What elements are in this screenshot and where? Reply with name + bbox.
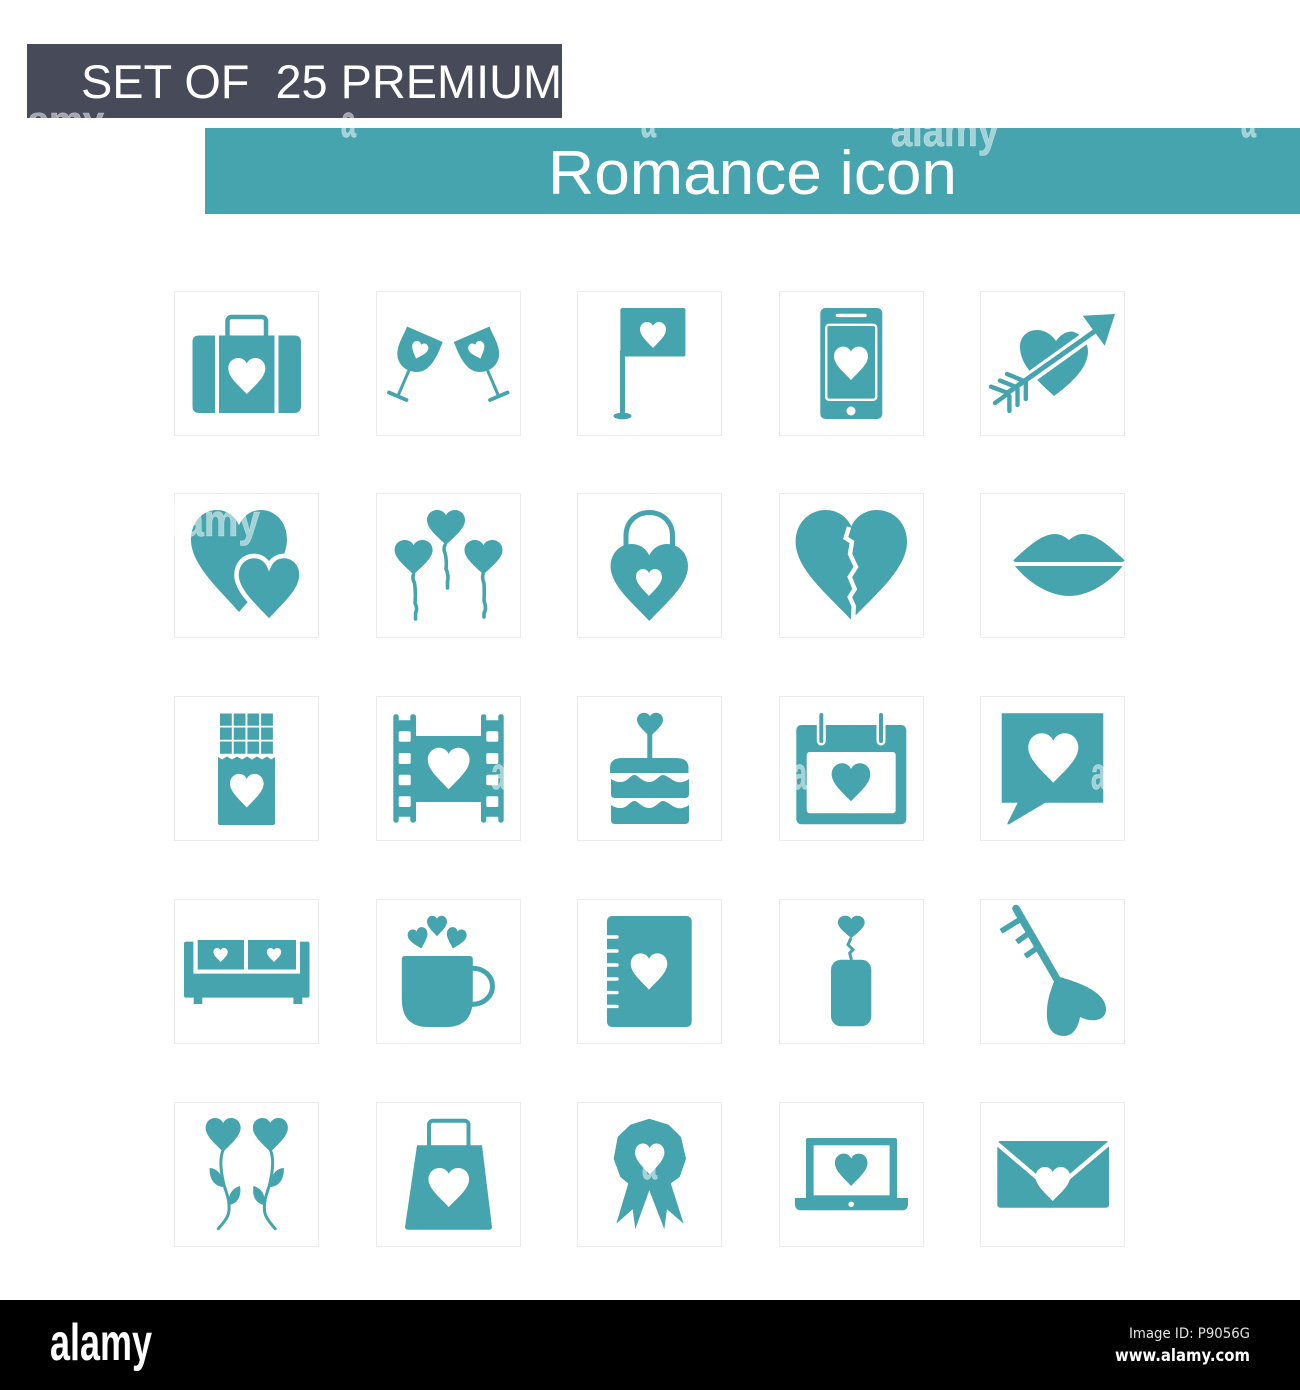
icon: suitcase (174, 292, 318, 436)
watermark fragments (28, 96, 1257, 1189)
icon: love letter envelope (980, 1102, 1124, 1246)
icon: heart tag (780, 900, 924, 1044)
icon: birthday cake (578, 696, 722, 840)
watermark fragments: alamy (150, 495, 260, 546)
watermark fragments: a (792, 748, 808, 799)
icon: two hearts (174, 494, 318, 638)
watermark fragments: a (341, 96, 357, 147)
icon: heart key (980, 900, 1124, 1044)
icon: flag (578, 292, 722, 436)
icon: coffee mug with hearts (376, 900, 520, 1044)
banner: set of 25 premium (27, 44, 562, 118)
watermark fragments: a (1241, 96, 1257, 147)
watermark fragments: a (642, 1138, 658, 1189)
footer website: www.alamy.com (1115, 1346, 1250, 1366)
footer bar (0, 1300, 1300, 1390)
banner: set of 25 premium: SET OF 25 PREMIUM (81, 55, 562, 108)
icon: heart with arrow (980, 292, 1124, 436)
icon: heart padlock (578, 494, 722, 638)
icon: calendar (780, 696, 924, 840)
watermark fragments: a (1091, 748, 1107, 799)
icon: film strip (376, 696, 520, 840)
icon: notebook (578, 900, 722, 1044)
icon: laptop (780, 1102, 924, 1246)
footer logo: alamy (50, 1314, 152, 1372)
icon: shopping bag (376, 1102, 520, 1246)
watermark fragments: amy (28, 101, 104, 139)
icon: broken heart (780, 494, 924, 638)
watermark fragments: alamy (891, 105, 999, 156)
icon: lips (980, 494, 1124, 638)
watermark fragments: a (491, 748, 507, 799)
banner: title Romance icon (205, 128, 1300, 214)
icon: wine glasses (376, 292, 520, 436)
icon: speech bubble (980, 696, 1124, 840)
banner: title Romance icon: Romance icon (548, 139, 957, 208)
icon: award ribbon (578, 1102, 722, 1246)
icon: heart flowers (174, 1102, 318, 1246)
icon: smartphone (780, 292, 924, 436)
icon: heart balloons (376, 494, 520, 638)
footer image id: Image ID: P9056G (1129, 1326, 1250, 1342)
icon: sofa (174, 900, 318, 1044)
watermark fragments: a (641, 96, 657, 147)
icon: chocolate bar (174, 696, 318, 840)
icon grid (174, 292, 1124, 1246)
